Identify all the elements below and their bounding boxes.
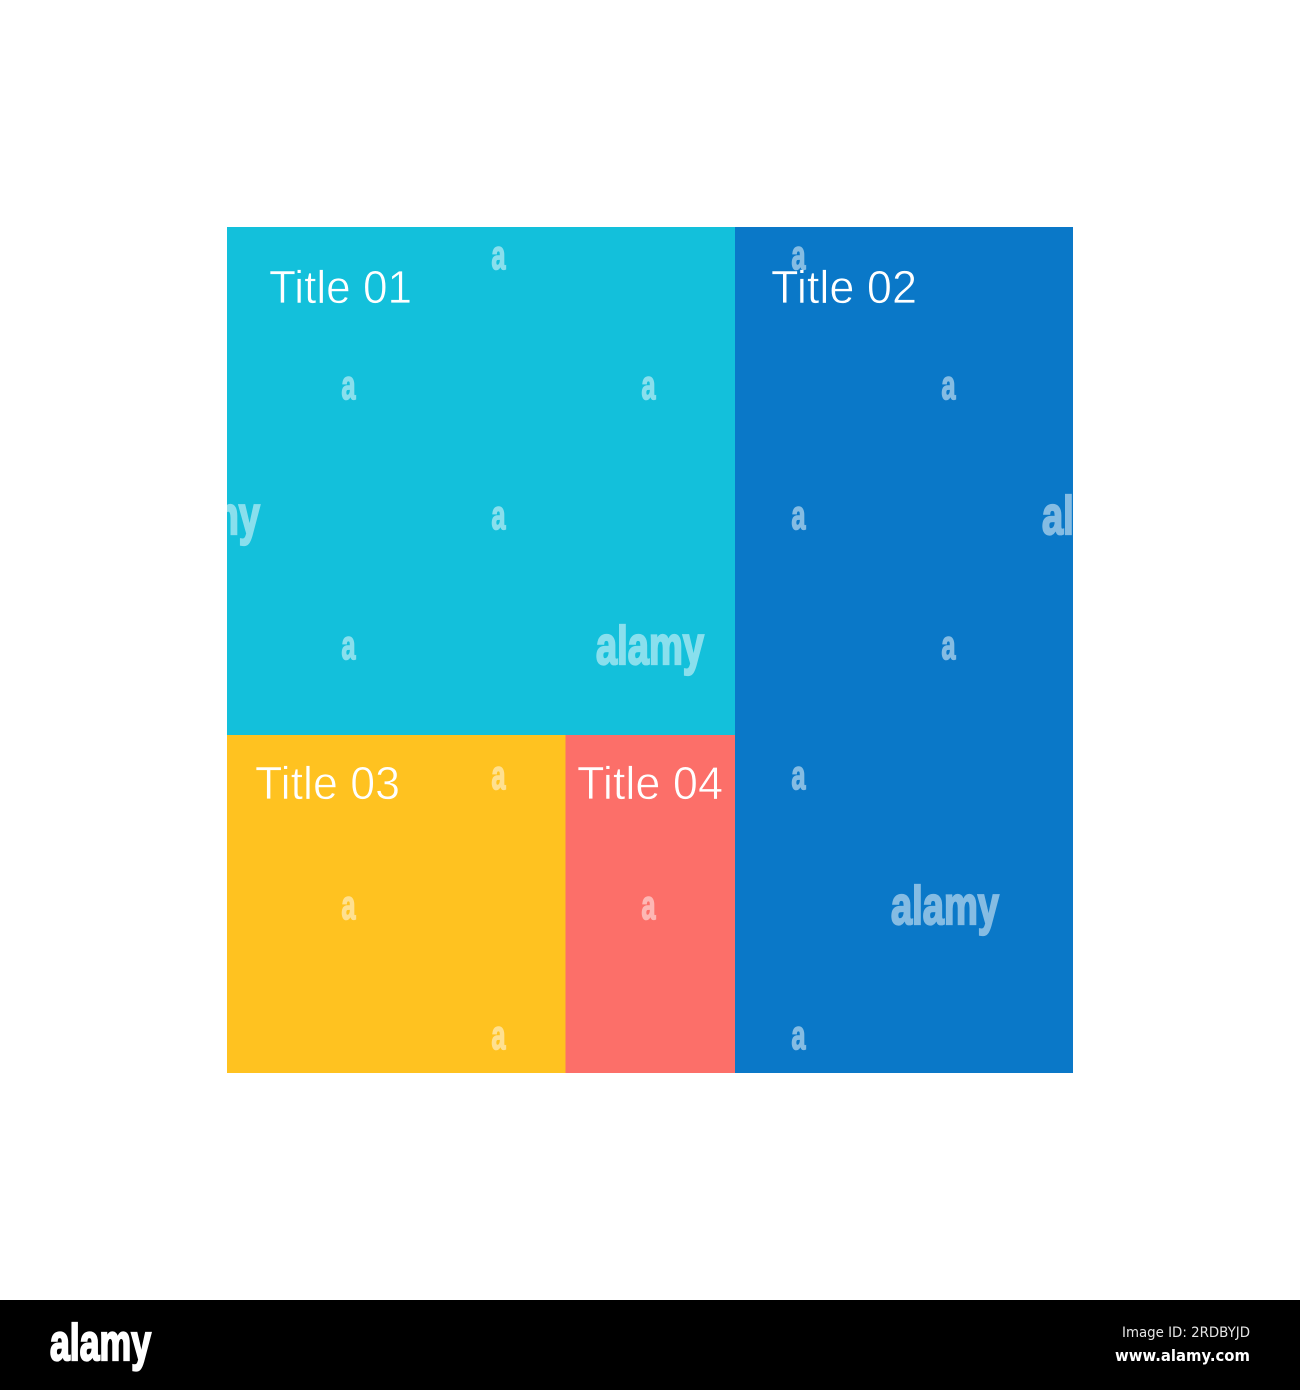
- watermark overlay: a: [342, 362, 356, 408]
- watermark overlay: a: [492, 1012, 506, 1058]
- footer logo: alamy: [50, 1314, 151, 1371]
- panel: title 01: [227, 227, 735, 735]
- watermark overlay: a: [792, 492, 806, 538]
- watermark overlay: a: [492, 492, 506, 538]
- watermark overlay: a: [492, 752, 506, 798]
- watermark overlay: a: [492, 232, 506, 278]
- website: www.alamy.com: [1115, 1346, 1250, 1365]
- treemap chart: [227, 227, 1073, 1073]
- watermark overlay: a: [342, 882, 356, 928]
- watermark overlay: a: [792, 1012, 806, 1058]
- panel: title 03: Title 03: [255, 757, 400, 809]
- panel: title 02: [735, 227, 1073, 1073]
- watermark overlay: a: [642, 362, 656, 408]
- panel: title 04: Title 04: [577, 757, 723, 809]
- panel: title 03: [227, 735, 566, 1073]
- watermark overlay: alamy: [596, 616, 704, 676]
- watermark overlay: [227, 246, 1072, 1050]
- watermark overlay: a: [642, 882, 656, 928]
- watermark overlay: alamy: [891, 876, 999, 936]
- watermark overlay: a: [942, 362, 956, 408]
- panel: title 01: Title 01: [269, 261, 412, 313]
- image id: Image ID: 2RDBYJD: [1122, 1325, 1250, 1341]
- watermark overlay: a: [342, 622, 356, 668]
- watermark overlay: a: [792, 232, 806, 278]
- watermark overlay: a: [792, 752, 806, 798]
- panel: title 02: Title 02: [771, 261, 917, 313]
- panel: title 04: [566, 735, 735, 1073]
- footer bar: [0, 1300, 1300, 1390]
- watermark overlay: a: [942, 622, 956, 668]
- watermark overlay: alamy: [152, 486, 260, 546]
- watermark overlay: alamy: [1042, 486, 1150, 546]
